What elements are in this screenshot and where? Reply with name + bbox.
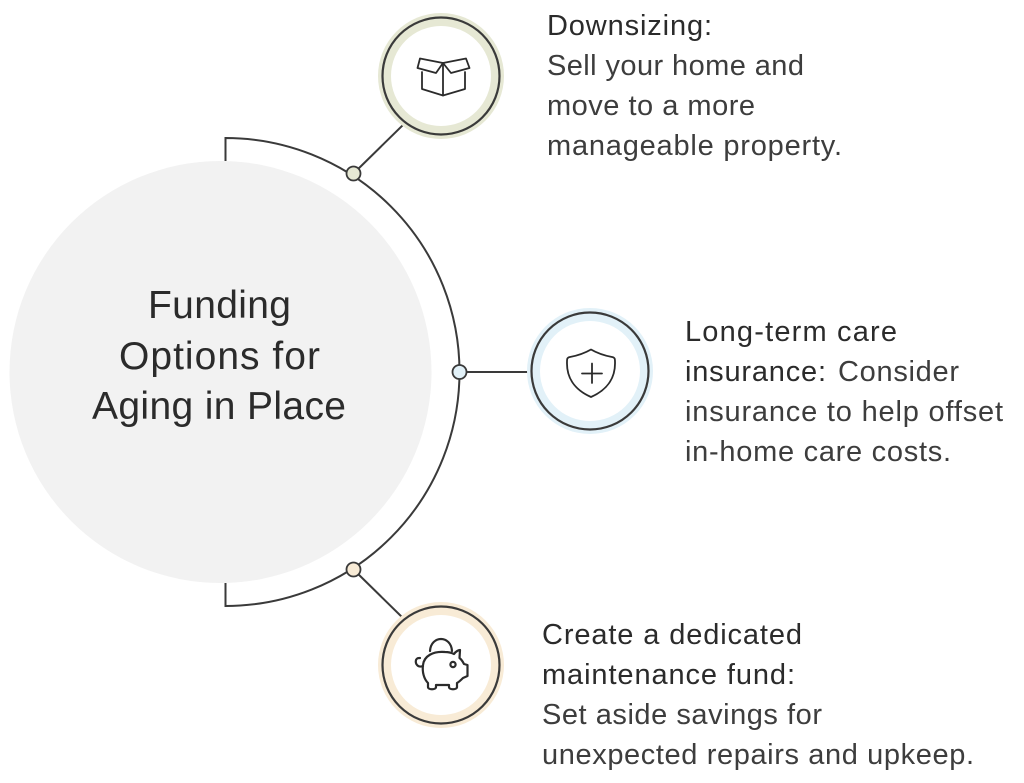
- arc bracket: [226, 138, 460, 606]
- title: Aging in Place: [92, 385, 346, 428]
- text: maintenance fund: maintenance fund:: [542, 659, 795, 691]
- title: Options for: [119, 335, 320, 378]
- text: long-term care insurance: in-home care costs.: [685, 436, 951, 468]
- text: maintenance fund: Create a dedicated: [542, 619, 802, 651]
- icon circle: downsizing: [378, 13, 504, 139]
- text: maintenance fund: unexpected repairs and upkeep.: [542, 739, 974, 771]
- icon: box: [418, 58, 470, 96]
- text: long-term care insurance: insurance to help offset: [685, 396, 1003, 428]
- title: Funding: [148, 284, 291, 327]
- text: long-term care insurance: [685, 316, 1003, 468]
- title: [92, 284, 346, 428]
- text: downsizing: move to a more: [547, 90, 755, 122]
- connector: insurance: [460, 371, 531, 373]
- text: maintenance fund: Set aside savings for: [542, 699, 822, 731]
- icon: piggy bank: [416, 639, 468, 689]
- text: long-term care insurance: Consider: [838, 356, 959, 388]
- connector: maintenance fund: [354, 570, 405, 620]
- icon circle: insurance: [527, 308, 653, 434]
- icon circle: maintenance fund: [378, 602, 504, 728]
- node: maintenance fund: [346, 562, 360, 576]
- text: downsizing: Downsizing:: [547, 10, 712, 42]
- text: maintenance fund: [542, 619, 974, 771]
- text: long-term care insurance: insurance:: [685, 356, 826, 388]
- text: downsizing: manageable property.: [547, 130, 842, 162]
- node: downsizing: [346, 166, 360, 180]
- text: downsizing: [547, 10, 842, 162]
- text: downsizing: Sell your home and: [547, 50, 804, 82]
- node: insurance: [452, 365, 466, 379]
- connector: downsizing: [354, 123, 405, 174]
- center circle: [10, 161, 432, 583]
- icon: shield with plus: [567, 350, 615, 397]
- text: long-term care insurance: Long-term care: [685, 316, 897, 348]
